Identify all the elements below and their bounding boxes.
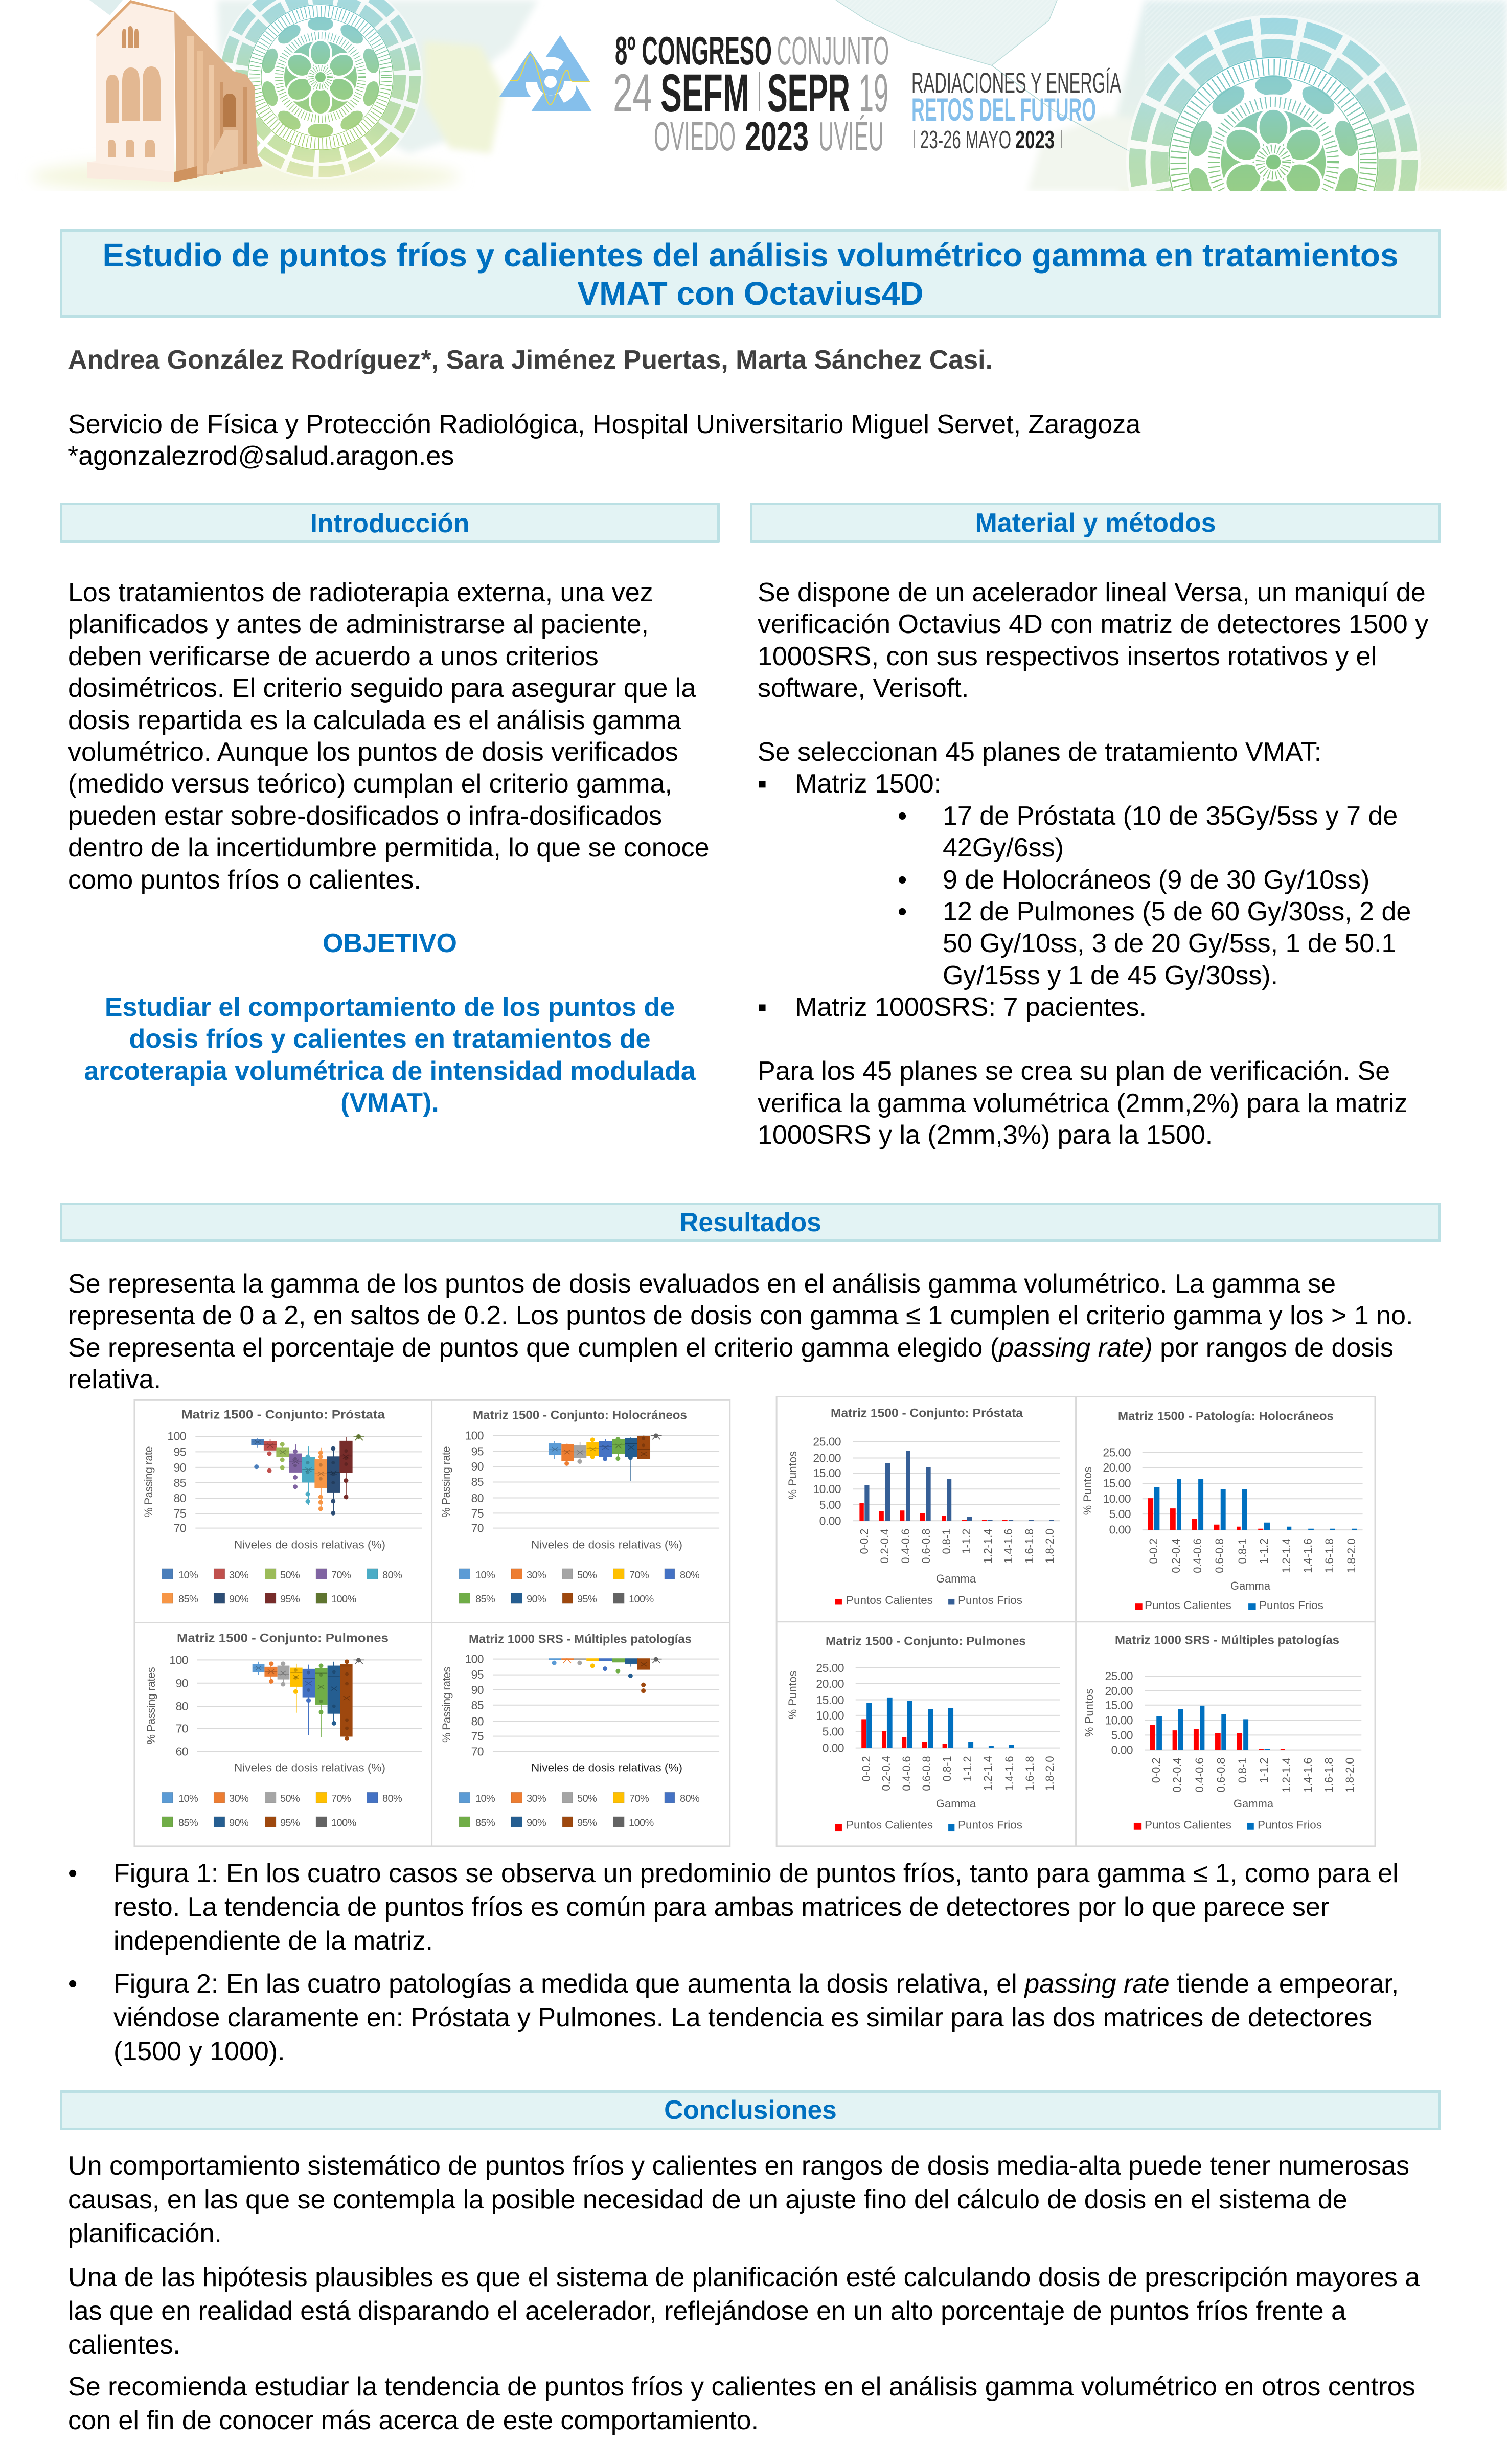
chart: holocraneos: 0.4-0.6 — [1191, 1539, 1204, 1573]
chart: multiples patologias: 0.6-0.8 — [1215, 1757, 1227, 1793]
heading: material y metodos — [750, 503, 1441, 543]
text: material y metodos: 17 de Próstata (10 de 35Gy/5ss y 7 de — [943, 801, 1398, 831]
chart: multiples patologias — [1083, 1634, 1361, 1832]
text: material y metodos — [758, 578, 1428, 1150]
chart: prostata: 0.4-0.6 — [899, 1529, 912, 1564]
chart: holocraneos: % Puntos — [1081, 1467, 1094, 1515]
chart: prostata: Gamma — [936, 1572, 976, 1585]
chart: multiples patologias: 50% — [577, 1793, 597, 1804]
chart: holocraneos: 90 — [471, 1460, 484, 1473]
text: objetivo: OBJETIVO — [323, 929, 457, 958]
text: conclusion 1: causas, en las que se contempla la posible necesidad de un ajuste fino del cálculo de dosis en el sistema de — [68, 2185, 1348, 2214]
chart: holocraneos: 30% — [527, 1570, 546, 1581]
text: conclusion 3 — [68, 2372, 1415, 2435]
chart: prostata: 100 — [167, 1430, 186, 1443]
text: material y metodos: 42Gy/6ss) — [943, 833, 1064, 863]
bullet: figura 2: (1500 y 1000). — [113, 2037, 285, 2066]
chart: multiples patologias — [440, 1633, 719, 1829]
bullet: figura 1: resto. La tendencia de puntos fríos es común para ambas matrices de detectores por lo que parece ser — [113, 1892, 1329, 1922]
chart: pulmones: 70 — [176, 1722, 188, 1735]
chart: holocraneos — [440, 1409, 719, 1605]
chart: holocraneos: 100% — [629, 1594, 654, 1605]
chart: prostata: 10% — [178, 1570, 198, 1581]
watercolor wash: right — [836, 0, 1507, 191]
chart: pulmones: 95% — [280, 1818, 300, 1829]
chart: multiples patologias: 1-1.2 — [1258, 1757, 1270, 1783]
bullet: figura 2 — [68, 1969, 1399, 2066]
text: material y metodos: ▪ — [758, 992, 767, 1022]
text: material y metodos: Se seleccionan 45 planes de tratamiento VMAT: — [758, 737, 1321, 767]
chart: holocraneos: 1.2-1.4 — [1280, 1539, 1293, 1573]
text: introduccion: planificados y antes de administrarse al paciente, — [68, 609, 649, 639]
chart: pulmones: 10.00 — [816, 1709, 844, 1722]
affiliation: *agonzalezrod@salud.aragon.es — [68, 441, 454, 471]
chart: prostata — [142, 1408, 422, 1605]
text: material y metodos: • — [898, 865, 907, 895]
congress motto: 2023 — [1015, 126, 1055, 154]
chart: holocraneos: 10% — [475, 1570, 495, 1581]
text: conclusion 1 — [68, 2151, 1409, 2248]
chart: holocraneos: Puntos Calientes — [1145, 1599, 1231, 1612]
title — [60, 229, 1441, 318]
chart: holocraneos: 85 — [471, 1475, 484, 1488]
chart: pulmones: 70% — [331, 1793, 351, 1804]
chart: multiples patologias: 20.00 — [1105, 1684, 1133, 1698]
chart frames — [777, 1396, 1375, 1846]
chart: pulmones: 1-1.2 — [961, 1756, 974, 1781]
text: material y metodos: 12 de Pulmones (5 de 60 Gy/30ss, 2 de — [943, 897, 1411, 926]
chart: pulmones: 25.00 — [816, 1661, 844, 1675]
chart: prostata: Matriz 1500 - Conjunto: Próstata — [181, 1408, 385, 1422]
chart: prostata: 80 — [174, 1491, 186, 1505]
chart: multiples patologias: 0.2-0.4 — [1171, 1757, 1183, 1793]
chart: prostata: 95 — [174, 1445, 186, 1458]
chart: holocraneos: 70 — [471, 1522, 484, 1535]
chart: holocraneos: 85% — [475, 1594, 495, 1605]
bullet: figura 1: • — [68, 1859, 77, 1888]
title: Estudio de puntos fríos y calientes del análisis volumétrico gamma en tratamientos — [102, 237, 1399, 274]
bullet: figura 1: Figura 1: En los cuatro casos se observa un predominio de puntos fríos, tanto para gamma ≤ 1, como para el — [113, 1859, 1399, 1888]
chart: multiples patologias: 25.00 — [1105, 1669, 1133, 1683]
chart: pulmones: 10% — [178, 1793, 198, 1804]
chart: pulmones: 85% — [178, 1818, 198, 1829]
chart: multiples patologias: Puntos Calientes — [1145, 1819, 1231, 1832]
chart: prostata: 85% — [178, 1594, 198, 1605]
congress heading: UVIÉU — [818, 114, 884, 159]
text: objetivo: dosis fríos y calientes en tratamientos de — [129, 1024, 651, 1054]
chart: pulmones: Gamma — [936, 1797, 976, 1810]
authors: Andrea González Rodríguez*, Sara Jiménez Puertas, Marta Sánchez Casi. — [68, 345, 993, 375]
chart: pulmones: 0-0.2 — [860, 1756, 873, 1781]
chart: pulmones: 0.8-1 — [941, 1756, 953, 1781]
chart: multiples patologias: 70% — [629, 1793, 649, 1804]
header banner — [33, 0, 1507, 191]
text: material y metodos: Matriz 1000SRS: 7 pacientes. — [795, 992, 1147, 1022]
chart: pulmones: 15.00 — [816, 1693, 844, 1707]
chart: holocraneos: 80% — [680, 1570, 700, 1581]
text: conclusion 3: con el fin de conocer más acerca de este comportamiento. — [68, 2406, 759, 2435]
chart: pulmones: 60 — [176, 1745, 188, 1758]
text: introduccion: dosimétricos. El criterio seguido para asegurar que la — [68, 673, 696, 703]
chart: holocraneos: Matriz 1500 - Patología: Holocráneos — [1118, 1410, 1334, 1423]
chart: prostata: 50% — [280, 1570, 300, 1581]
chart: prostata: 0-0.2 — [858, 1529, 871, 1554]
chart: multiples patologias: 1.6-1.8 — [1322, 1757, 1335, 1793]
chart: holocraneos: 1.8-2.0 — [1345, 1539, 1358, 1573]
title: VMAT con Octavius4D — [578, 275, 923, 312]
chart: multiples patologias: 75 — [471, 1730, 484, 1743]
chart: pulmones: 100% — [331, 1818, 357, 1829]
text: material y metodos: 50 Gy/10ss, 3 de 20 Gy/5ss, 1 de 50.1 — [943, 929, 1396, 958]
chart: prostata: 0.8-1 — [940, 1529, 953, 1554]
heading: resultados — [60, 1203, 1441, 1242]
chart: prostata: Matriz 1500 - Conjunto: Próstata — [831, 1407, 1023, 1420]
text: material y metodos: Gy/15ss y 1 de 45 Gy/30ss). — [943, 961, 1278, 990]
text: conclusion 1: Un comportamiento sistemático de puntos fríos y calientes en rangos de dosis media-alta puede tener numerosas — [68, 2151, 1409, 2181]
chart: pulmones: 90% — [229, 1818, 249, 1829]
chart: multiples patologias: 70 — [471, 1745, 484, 1758]
chart: multiples patologias: 1.2-1.4 — [1280, 1757, 1293, 1793]
watercolor wash: left — [31, 0, 538, 195]
figure 2: bar charts — [776, 1396, 1376, 1847]
chart: multiples patologias: 80% — [680, 1793, 700, 1804]
chart: pulmones: Puntos Frios — [958, 1819, 1022, 1832]
chart: pulmones: Matriz 1500 - Conjunto: Pulmones — [826, 1635, 1026, 1648]
congress heading: SEFM — [660, 63, 749, 123]
text: resultados: relativa. — [68, 1365, 161, 1394]
chart: prostata: 1.6-1.8 — [1023, 1529, 1036, 1564]
chart: holocraneos: 0.2-0.4 — [1170, 1539, 1182, 1573]
chart: holocraneos: 1.6-1.8 — [1323, 1539, 1336, 1573]
chart: pulmones: Puntos Calientes — [846, 1819, 933, 1832]
chart: pulmones: 5.00 — [823, 1725, 844, 1738]
chart: pulmones: 0.2-0.4 — [880, 1756, 893, 1791]
congress heading: 8º CONGRESO — [615, 28, 772, 73]
chart: multiples patologias: Matriz 1000 SRS - Múltiples patologías — [469, 1633, 692, 1646]
chart: multiples patologias: Puntos Frios — [1258, 1819, 1322, 1832]
text: conclusion 2 — [68, 2263, 1420, 2360]
chart: prostata: 75 — [174, 1507, 186, 1520]
chart: pulmones: 80 — [176, 1700, 188, 1713]
chart: pulmones: % Passing rates — [145, 1667, 157, 1745]
chart: holocraneos: Gamma — [1230, 1579, 1271, 1592]
chart: pulmones: 0.4-0.6 — [900, 1756, 913, 1791]
chart: multiples patologias: % Puntos — [1083, 1689, 1095, 1737]
chart: prostata: % Puntos — [786, 1451, 799, 1499]
chart: prostata: 1.2-1.4 — [981, 1529, 994, 1564]
text: material y metodos: software, Verisoft. — [758, 673, 969, 703]
congress motto — [911, 66, 1121, 154]
chart: multiples patologias: 95 — [471, 1668, 484, 1681]
chart: holocraneos: 15.00 — [1103, 1477, 1131, 1490]
chart: pulmones: % Puntos — [786, 1671, 799, 1719]
chart: pulmones: 1.8-2.0 — [1043, 1756, 1056, 1791]
chart: pulmones: 80% — [382, 1793, 402, 1804]
text: material y metodos: 1000SRS, con sus respectivos insertos rotativos y el — [758, 642, 1377, 671]
chart: prostata: 1-1.2 — [960, 1529, 973, 1554]
chart: holocraneos: 80 — [471, 1491, 484, 1505]
chart: pulmones: 1.6-1.8 — [1023, 1756, 1036, 1791]
text: introduccion: Los tratamientos de radioterapia externa, una vez — [68, 578, 653, 607]
chart: prostata: 80% — [382, 1570, 402, 1581]
chart: holocraneos: 0.6-0.8 — [1213, 1539, 1226, 1573]
chart: holocraneos: Matriz 1500 - Conjunto: Holocráneos — [473, 1409, 687, 1422]
chart: prostata: 90% — [229, 1594, 249, 1605]
congress heading: CONJUNTO — [777, 28, 889, 73]
chart: prostata: 85 — [174, 1476, 186, 1489]
chart: prostata: 10.00 — [813, 1482, 841, 1496]
chart: holocraneos: 5.00 — [1109, 1507, 1131, 1521]
chart: prostata: % Passing rate — [142, 1446, 155, 1518]
chart: prostata: Puntos Frios — [958, 1594, 1022, 1607]
chart: multiples patologias: 0.00 — [1111, 1744, 1133, 1756]
chart: prostata: 70 — [174, 1522, 186, 1535]
chart: pulmones — [786, 1635, 1060, 1832]
heading: introduccion — [60, 503, 720, 543]
chart: prostata: 20.00 — [813, 1451, 841, 1464]
text: introduccion: (medido versus teórico) cumplan el criterio gamma, — [68, 769, 672, 799]
congress motto: RADIACIONES Y ENERGÍA — [911, 66, 1121, 99]
bullet: figura 2: • — [68, 1969, 77, 1999]
chart: holocraneos: Niveles de dosis relativas (%) — [531, 1539, 682, 1551]
chart: multiples patologias: 80 — [471, 1715, 484, 1728]
bullet: figura 2: Figura 2: En las cuatro patologías a medida que aumenta la dosis relativa, el passing rate tiende a empeorar, — [113, 1969, 1399, 1999]
text: resultados: Se representa el porcentaje de puntos que cumplen el criterio gamma elegido (passing rate) por rangos de dosis — [68, 1333, 1394, 1363]
chart: prostata: 0.2-0.4 — [878, 1529, 891, 1564]
chart: prostata: 100% — [331, 1594, 357, 1605]
text: material y metodos: • — [898, 897, 907, 926]
chart: multiples patologias: 0.4-0.6 — [1193, 1757, 1206, 1793]
chart: multiples patologias: 30% — [527, 1793, 546, 1804]
congress heading — [613, 28, 889, 159]
chart: prostata: Niveles de dosis relativas (%) — [234, 1539, 385, 1551]
chart: holocraneos: 1.4-1.6 — [1302, 1539, 1314, 1573]
chart: multiples patologias: 1.4-1.6 — [1302, 1757, 1314, 1793]
heading: material y metodos: Material y métodos — [975, 508, 1216, 538]
figure 1: box plots — [134, 1399, 731, 1847]
chart: holocraneos: 90% — [527, 1594, 546, 1605]
chart: holocraneos: 1-1.2 — [1258, 1539, 1270, 1564]
text: conclusion 1: planificación. — [68, 2219, 222, 2248]
chart: prostata: Puntos Calientes — [846, 1594, 933, 1607]
chart: multiples patologias: 85 — [471, 1699, 484, 1712]
icon: church — [87, 0, 263, 182]
chart frames — [134, 1400, 730, 1846]
text: introduccion: deben verificarse de acuerdo a unos criterios — [68, 642, 599, 671]
chart: holocraneos: 70% — [629, 1570, 649, 1581]
chart: pulmones: 0.00 — [823, 1742, 844, 1754]
heading: conclusiones — [60, 2090, 1441, 2130]
chart: multiples patologias: 1.8-2.0 — [1343, 1757, 1356, 1793]
chart: pulmones: Matriz 1500 - Conjunto: Pulmones — [177, 1632, 389, 1645]
chart: holocraneos: 25.00 — [1103, 1445, 1131, 1459]
text: conclusion 2: calientes. — [68, 2330, 180, 2360]
text: resultados — [68, 1269, 1413, 1394]
chart: multiples patologias: Niveles de dosis relativas (%) — [531, 1761, 682, 1774]
heading: introduccion: Introducción — [310, 508, 469, 538]
congress heading: OVIEDO — [654, 114, 736, 159]
text: material y metodos: verificación Octavius 4D con matriz de detectores 1500 y — [758, 609, 1428, 639]
heading: resultados: Resultados — [679, 1207, 821, 1237]
text: material y metodos: Matriz 1500: — [795, 769, 941, 799]
chart: holocraneos: 0.00 — [1109, 1523, 1131, 1536]
chart: holocraneos: 0.8-1 — [1236, 1539, 1249, 1564]
chart: prostata: 0.00 — [819, 1514, 841, 1528]
chart: pulmones: 1.2-1.4 — [981, 1756, 994, 1791]
text: resultados: representa de 0 a 2, en saltos de 0.2. Los puntos de dosis con gamma ≤ 1 cumplen el criterio gamma y los > 1 no. — [68, 1301, 1413, 1330]
chart: holocraneos: 50% — [577, 1570, 597, 1581]
chart: multiples patologias: Matriz 1000 SRS - Múltiples patologías — [1115, 1634, 1339, 1647]
chart: holocraneos: 95 — [471, 1444, 484, 1458]
chart: pulmones: 30% — [229, 1793, 249, 1804]
text: objetivo: arcoterapia volumétrica de intensidad modulada — [84, 1056, 696, 1086]
chart: multiples patologias: 100 — [465, 1652, 484, 1665]
chart: holocraneos: 10.00 — [1103, 1492, 1131, 1505]
text: introduccion: pueden estar sobre-dosificados o infra-dosificados — [68, 801, 662, 831]
bullet: figura 2: viéndose claramente en: Próstata y Pulmones. La tendencia es similar para las dos matrices de detectores — [113, 2003, 1372, 2032]
chart: multiples patologias: 90% — [527, 1818, 546, 1829]
chart: prostata: 90 — [174, 1461, 186, 1474]
chart: pulmones — [145, 1632, 422, 1829]
chart: pulmones: 20.00 — [816, 1677, 844, 1690]
text: material y metodos: ▪ — [758, 769, 767, 799]
text: conclusion 3: Se recomienda estudiar la tendencia de puntos fríos y calientes en el análisis gamma volumétrico en otros centros — [68, 2372, 1415, 2402]
mandala left — [218, 0, 423, 179]
text: objetivo — [84, 929, 696, 1118]
chart: pulmones: Niveles de dosis relativas (%) — [234, 1761, 385, 1774]
chart: prostata: 1.4-1.6 — [1002, 1529, 1015, 1564]
affiliation: Servicio de Física y Protección Radiológica, Hospital Universitario Miguel Servet, Zaragoza — [68, 410, 1140, 439]
mandala right — [1126, 15, 1421, 309]
chart: holocraneos: 0-0.2 — [1147, 1539, 1160, 1564]
logo trefoil — [499, 35, 592, 111]
chart: multiples patologias: 85% — [475, 1818, 495, 1829]
text: introduccion — [68, 578, 710, 895]
congress motto: RETOS DEL FUTURO — [911, 92, 1096, 128]
chart: pulmones: 1.4-1.6 — [1003, 1756, 1016, 1791]
text: conclusion 2: las que en realidad está disparando el acelerador, reflejándose en un alto porcentaje de puntos fríos frente a — [68, 2296, 1346, 2326]
text: material y metodos: verifica la gamma volumétrica (2mm,2%) para la matriz — [758, 1088, 1407, 1118]
chart: multiples patologias: 95% — [577, 1818, 597, 1829]
text: introduccion: como puntos fríos o calientes. — [68, 865, 421, 895]
chart: multiples patologias: 10% — [475, 1793, 495, 1804]
text: material y metodos: Se dispone de un acelerador lineal Versa, un maniquí de — [758, 578, 1426, 607]
text: introduccion: volumétrico. Aunque los puntos de dosis verificados — [68, 737, 678, 767]
chart: multiples patologias: 10.00 — [1105, 1714, 1133, 1727]
chart: multiples patologias: % Passing rates — [440, 1667, 453, 1743]
chart: multiples patologias: 0-0.2 — [1150, 1757, 1162, 1783]
chart: holocraneos: 75 — [471, 1507, 484, 1520]
text: material y metodos: 9 de Holocráneos (9 de 30 Gy/10ss) — [943, 865, 1369, 895]
congress heading: SEPR — [767, 63, 850, 123]
text: introduccion: dosis repartida es la calculada es el análisis gamma — [68, 706, 681, 735]
chart: holocraneos: % Passing rate — [440, 1446, 452, 1518]
text: material y metodos: Para los 45 planes se crea su plan de verificación. Se — [758, 1056, 1390, 1086]
affiliation — [68, 410, 1141, 471]
chart: holocraneos: 100 — [465, 1429, 484, 1442]
congress heading: 2023 — [745, 114, 809, 159]
heading: conclusiones: Conclusiones — [664, 2095, 837, 2124]
chart: prostata: 70% — [331, 1570, 351, 1581]
chart: multiples patologias: 15.00 — [1105, 1699, 1133, 1712]
chart: pulmones: 50% — [280, 1793, 300, 1804]
chart: prostata: 0.6-0.8 — [920, 1529, 932, 1564]
chart: prostata: 5.00 — [819, 1498, 841, 1511]
chart: prostata: 95% — [280, 1594, 300, 1605]
chart: multiples patologias: Gamma — [1234, 1797, 1274, 1810]
text: conclusion 2: Una de las hipótesis plausibles es que el sistema de planificación esté calculando dosis de prescripción mayores a — [68, 2263, 1420, 2292]
chart: prostata: 1.8-2.0 — [1043, 1529, 1056, 1564]
bullet: figura 1 — [68, 1859, 1399, 1956]
chart: multiples patologias: 5.00 — [1111, 1729, 1133, 1742]
chart: multiples patologias: 90 — [471, 1683, 484, 1697]
text: introduccion: dentro de la incertidumbre permitida, lo que se conoce — [68, 833, 710, 863]
congress motto: 23-26 MAYO — [920, 126, 1011, 154]
bullet: figura 1: independiente de la matriz. — [113, 1926, 433, 1956]
chart: prostata: 15.00 — [813, 1466, 841, 1480]
chart: holocraneos: 95% — [577, 1594, 597, 1605]
chart: pulmones: 0.6-0.8 — [920, 1756, 933, 1791]
chart: holocraneos — [1081, 1410, 1363, 1612]
chart: prostata — [786, 1407, 1060, 1607]
chart: pulmones: 100 — [169, 1653, 188, 1666]
chart: multiples patologias: 0.8-1 — [1236, 1757, 1249, 1783]
chart: holocraneos: 20.00 — [1103, 1461, 1131, 1474]
chart: prostata: 25.00 — [813, 1435, 841, 1448]
chart: prostata: 30% — [229, 1570, 249, 1581]
congress heading: 24 — [613, 63, 652, 123]
chart: holocraneos: Puntos Frios — [1259, 1599, 1323, 1612]
text: objetivo: (VMAT). — [340, 1088, 439, 1118]
text: material y metodos: 1000SRS y la (2mm,3%) para la 1500. — [758, 1120, 1213, 1150]
chart: pulmones: 90 — [176, 1677, 188, 1690]
congress heading: 19 — [859, 63, 888, 123]
chart: multiples patologias: 100% — [629, 1818, 654, 1829]
text: resultados: Se representa la gamma de los puntos de dosis evaluados en el análisis gamma volumétrico. La gamma se — [68, 1269, 1336, 1299]
text: objetivo: Estudiar el comportamiento de los puntos de — [105, 992, 675, 1022]
text: material y metodos: • — [898, 801, 907, 831]
